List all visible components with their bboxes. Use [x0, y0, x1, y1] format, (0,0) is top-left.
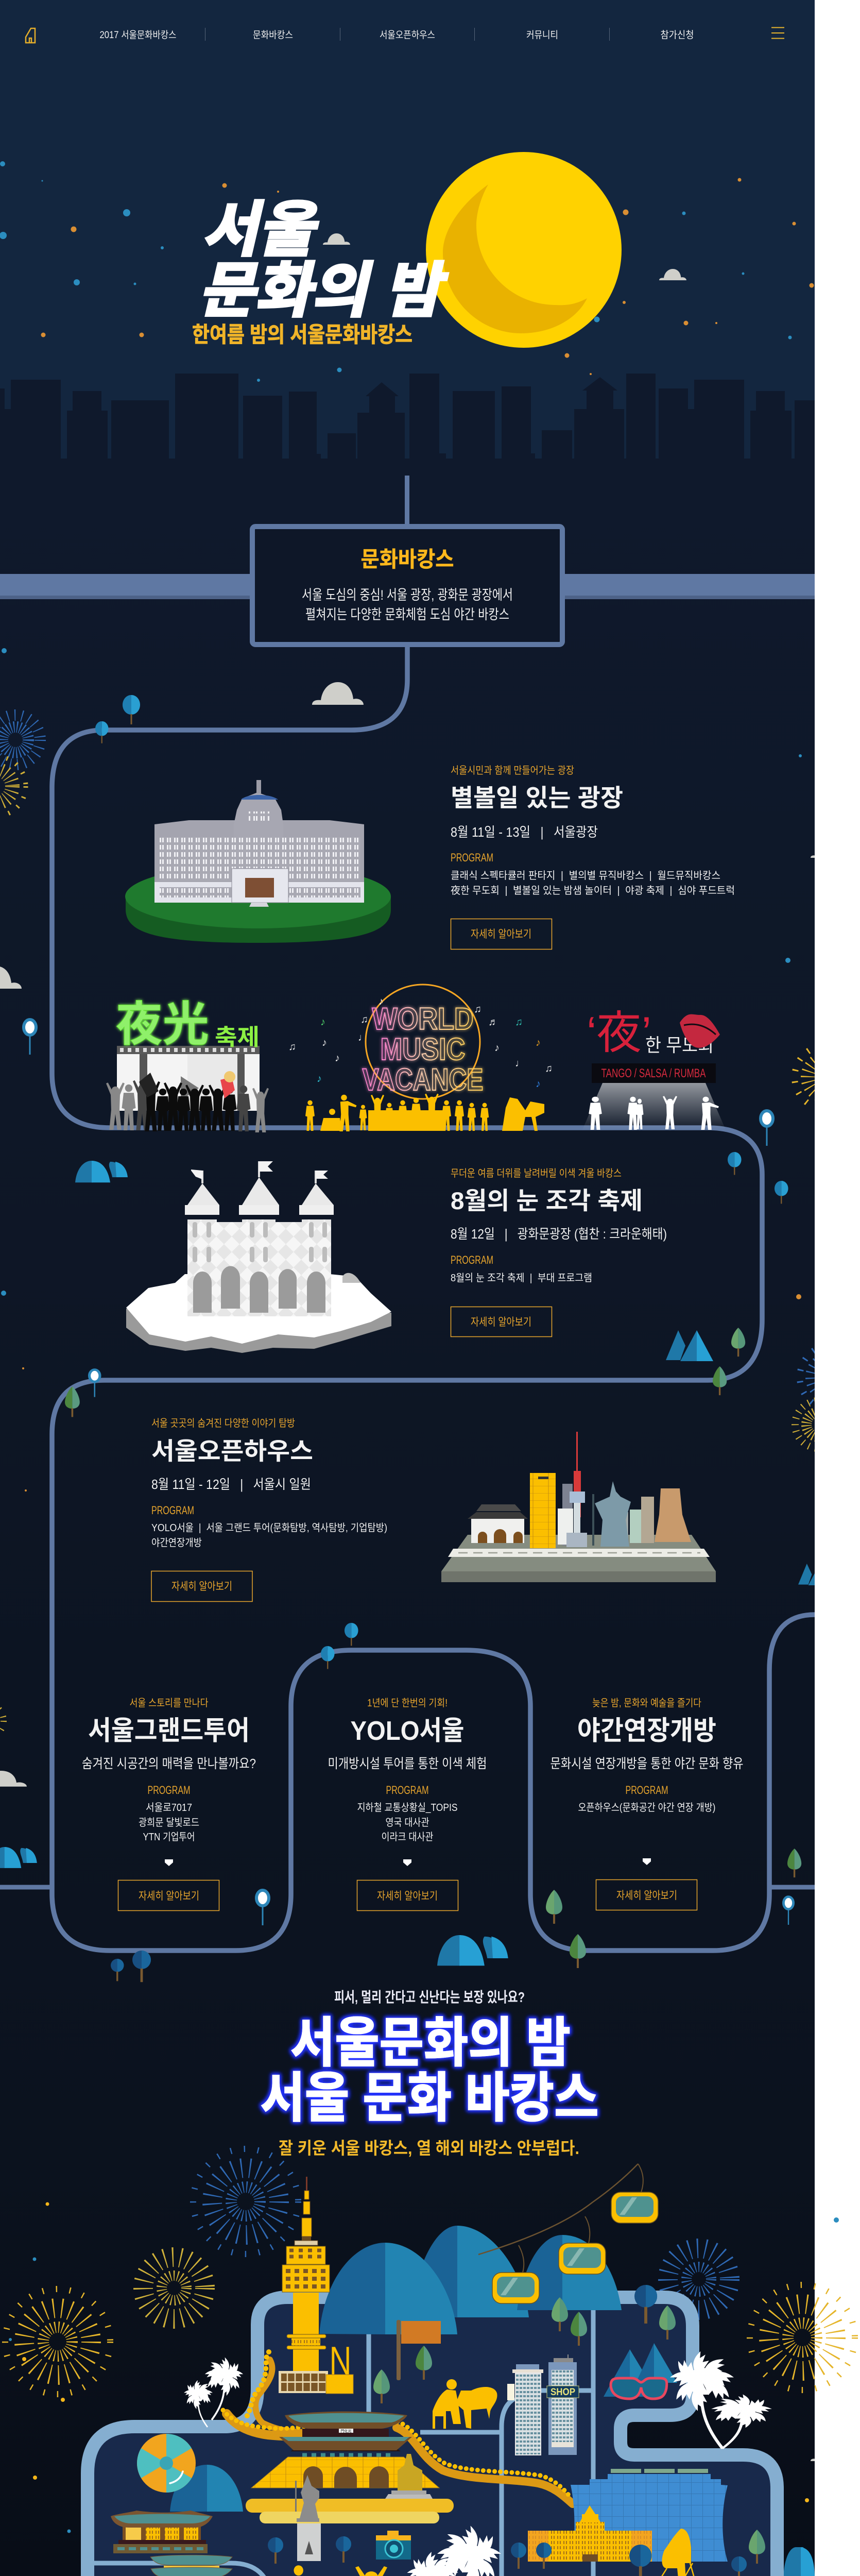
nav items: 서울오픈하우스 — [380, 29, 435, 41]
clouds: hero — [323, 233, 686, 280]
illustration: World Music Vacance: ♪ — [536, 1078, 541, 1090]
nav items: 커뮤니티 — [526, 29, 558, 41]
camera — [376, 2531, 411, 2560]
map illustration — [88, 2164, 786, 2576]
side scenery — [26, 2547, 815, 2576]
illustration: World Music Vacance: VACANCE — [363, 1062, 483, 1097]
button: 자세히 알아보기 — [471, 928, 531, 940]
fireworks — [0, 715, 860, 1737]
text block: 서울 곳곳의 숨겨진 다양한 이야기 탐방 — [151, 1417, 295, 1429]
N Seoul Tower: N — [330, 2338, 351, 2383]
illustration: World Music Vacance: ♫ — [515, 1016, 523, 1028]
towers: SHOP — [551, 2387, 575, 2398]
column: 야간연장개방: PROGRAM — [625, 1784, 668, 1797]
illustration: World Music Vacance: ♪ — [536, 1037, 541, 1048]
illustration: World Music Vacance: ♪ — [320, 1016, 325, 1028]
fireworks around map — [5, 2149, 855, 2394]
column: 서울그랜드투어: 서울 스토리를 만나다 — [130, 1697, 208, 1709]
text block — [151, 1417, 387, 1549]
illustration: 夜한 무도회: ‘夜’ — [587, 1007, 651, 1058]
dots — [1, 648, 802, 1492]
column: 야간연장개방 — [550, 1697, 744, 1910]
column: 야간연장개방: 문화시설 연장개방을 통한 야간 문화 향유 — [550, 1756, 744, 1771]
band and connector road — [0, 476, 815, 599]
icon: menu — [771, 28, 784, 38]
column: 서울그랜드투어 — [82, 1697, 256, 1910]
text block: 8월의 눈 조각 축제 — [451, 1187, 643, 1214]
illustration: snow castle — [126, 1161, 391, 1353]
lead-in: 피서, 멀리 간다고 신난다는 보장 있나요? — [334, 1989, 525, 2005]
column: 서울그랜드투어: 광희문 달빛로드 — [139, 1817, 199, 1828]
column: 야간연장개방: 늦은 밤, 문화와 예술을 즐기다 — [592, 1697, 701, 1709]
text block: 서울오픈하우스 — [151, 1437, 313, 1465]
top navigation — [26, 28, 784, 43]
text block: 8월 11일 - 13일 | 서울광장 — [451, 824, 598, 840]
icon: home — [26, 28, 35, 43]
text block — [451, 1167, 667, 1284]
nav items: 문화바캉스 — [253, 29, 293, 41]
text block: 클래식 스펙타큘러 판타지 | 별의별 뮤직바캉스 | 월드뮤직바캉스 — [451, 870, 720, 882]
hanok gate — [150, 2555, 232, 2576]
great wall right — [397, 2421, 573, 2504]
column: 서울그랜드투어: 서울로7017 — [146, 1802, 192, 1814]
hero title: 문화의 밤 — [196, 257, 453, 324]
illustration: World Music Vacance: ♪ — [317, 1073, 322, 1084]
section 1: square — [125, 765, 735, 949]
map dots — [9, 2202, 839, 2576]
old city hall gold — [528, 2505, 652, 2562]
Gwanghwamun gate: 門化光 — [341, 2429, 351, 2433]
section 2: snow festival — [126, 1161, 667, 1353]
text block: 夜한 무도회 | 별볼일 있는 밤샘 놀이터 | 야광 축제 | 심야 푸드트럭 — [451, 885, 735, 896]
great wall left — [223, 2352, 309, 2436]
hero title — [196, 196, 453, 324]
column: YOLO서울: 자세히 알아보기 — [377, 1890, 438, 1902]
text block: 야간연장개방 — [151, 1537, 202, 1549]
illustration: World Music Vacance: ♩ — [358, 1032, 368, 1043]
text block: PROGRAM — [451, 851, 493, 864]
road stubs — [0, 1887, 815, 2576]
map base — [88, 2297, 786, 2576]
section 4: three columns — [82, 1697, 744, 1910]
N Seoul Tower — [279, 2177, 353, 2394]
illustration: 夜한 무도회: TANGO / SALSA / RUMBA — [601, 1066, 706, 1080]
glow title: 서울 문화 바캉스 — [261, 2069, 598, 2128]
column: 서울그랜드투어: 서울그랜드투어 — [88, 1716, 250, 1746]
glow title — [261, 2013, 598, 2128]
silhouette: palm trees — [184, 2351, 772, 2576]
column: 야간연장개방: 자세히 알아보기 — [616, 1890, 677, 1902]
text block: PROGRAM — [151, 1504, 194, 1517]
column: 야간연장개방: 야간연장개방 — [577, 1716, 716, 1746]
button: 자세히 알아보기 — [171, 1581, 232, 1592]
illustration: World Music Vacance: ♫ — [545, 1063, 553, 1074]
text block: PROGRAM — [451, 1253, 493, 1266]
nav items: 참가신청 — [660, 29, 694, 41]
plaza strips — [246, 2499, 454, 2523]
map flags — [229, 2320, 441, 2576]
glass city hall — [571, 2469, 728, 2562]
column: 서울그랜드투어: YTN 기업투어 — [143, 1831, 195, 1843]
silhouette: pianist — [433, 2379, 497, 2429]
illustration: World Music Vacance: MUSIC — [380, 1032, 466, 1066]
section 5 heading — [261, 1989, 598, 2158]
intro heading: 문화바캉스 — [360, 547, 454, 571]
illustration: World Music Vacance: ♪ — [322, 1037, 327, 1048]
silhouette: dancers — [291, 2565, 387, 2576]
Admiral Yi statue — [295, 2475, 321, 2561]
text block: 8월의 눈 조각 축제 | 부대 프로그램 — [451, 1272, 592, 1284]
sub heading: 잘 키운 서울 바캉스, 열 해외 바캉스 안부럽다. — [279, 2139, 579, 2158]
text block: 8월 12일 | 광화문광장 (협찬 : 크라운해태) — [451, 1226, 667, 1242]
illustration: World Music Vacance: ♬ — [488, 1016, 498, 1028]
column: YOLO서울: 미개방시설 투어를 통한 이색 체험 — [328, 1756, 487, 1771]
illustration: World Music Vacance — [288, 985, 553, 1131]
nav items: 2017 서울문화바캉스 — [100, 29, 176, 41]
button — [451, 919, 552, 949]
Gwanghwamun gate — [251, 2411, 439, 2488]
column: 서울그랜드투어: 숨겨진 시공간의 매력을 만나볼까요? — [82, 1756, 256, 1771]
glasses — [611, 2378, 667, 2399]
text block — [451, 765, 735, 896]
button — [451, 1307, 552, 1336]
trees and pins — [0, 695, 831, 1982]
illustration: Seoul landmarks — [441, 1432, 716, 1582]
illustration: World Music Vacance: ♫ — [360, 1014, 368, 1025]
illustration: 夜한 무도회 — [582, 1007, 726, 1131]
column: YOLO서울: PROGRAM — [386, 1784, 428, 1797]
beach ball — [137, 2434, 196, 2493]
text block: 무더운 여름 더위를 날려버릴 이색 겨울 바캉스 — [451, 1167, 622, 1179]
illustration: 야광 축제 — [106, 998, 269, 1132]
illustration: World Music Vacance: WORLD — [372, 1002, 474, 1036]
towers — [507, 2354, 579, 2455]
panel: intro box — [252, 527, 562, 645]
King Sejong statue — [385, 2454, 433, 2499]
clouds — [312, 682, 364, 705]
hero title: 서울 — [199, 196, 326, 263]
intro text: 펼쳐지는 다양한 문화체험 도심 야간 바캉스 — [305, 607, 509, 622]
illustration: World Music Vacance: ♫ — [288, 1041, 296, 1053]
illustration: Seoul Library on green island — [125, 780, 391, 943]
silhouette: cellist — [658, 2529, 695, 2576]
nav items — [100, 29, 694, 41]
winding road — [52, 647, 815, 1951]
mountains — [170, 2226, 677, 2576]
illustration: 夜한 무도회: 한 무도회 — [645, 1035, 714, 1056]
intro text — [302, 587, 513, 622]
button — [151, 1571, 252, 1601]
hero stars — [0, 161, 814, 382]
button: 자세히 알아보기 — [471, 1316, 531, 1328]
illustration: 야광 축제: 축제 — [215, 1025, 260, 1050]
glow title: 서울문화의 밤 — [290, 2013, 571, 2073]
text block: YOLO서울 | 서울 그랜드 투어(문화탐방, 역사탐방, 기업탐방) — [151, 1522, 387, 1534]
column: YOLO서울: YOLO서울 — [350, 1716, 465, 1746]
column: 서울그랜드투어: PROGRAM — [147, 1784, 191, 1797]
illustration: World Music Vacance: ♪ — [335, 1053, 340, 1064]
column: YOLO서울: 지하철 교통상황실_TOPIS — [357, 1802, 457, 1814]
inner roads — [94, 2310, 770, 2576]
illustration: 야광 축제: 夜光 — [116, 998, 209, 1051]
hanok pavilion — [111, 2511, 213, 2553]
column: YOLO서울: 영국 대사관 — [385, 1817, 429, 1828]
moon — [426, 152, 622, 348]
illustration: World Music Vacance: ♪ — [494, 1042, 500, 1054]
cable car — [478, 2164, 658, 2303]
column: YOLO서울: 1년에 단 한번의 기회! — [367, 1697, 448, 1709]
illustration: World Music Vacance: ♩ — [515, 1058, 525, 1069]
column: 서울그랜드투어: 자세히 알아보기 — [139, 1890, 199, 1902]
illustration: World Music Vacance: ♪ — [379, 996, 384, 1007]
intro text: 서울 도심의 중심! 서울 광장, 광화문 광장에서 — [302, 587, 513, 603]
hero subtitle: 한여름 밤의 서울문화바캉스 — [192, 323, 412, 347]
text block: 서울시민과 함께 만들어가는 광장 — [451, 765, 574, 776]
city skyline — [0, 374, 815, 467]
section 3: open house — [151, 1417, 716, 1601]
illustration: World Music Vacance: ♫ — [474, 1004, 481, 1015]
column: YOLO서울: 이라크 대사관 — [381, 1831, 434, 1843]
text block: 8월 11일 - 12일 | 서울시 일원 — [151, 1477, 311, 1492]
column: YOLO서울 — [328, 1697, 487, 1910]
text block: 별볼일 있는 광장 — [451, 784, 623, 811]
map trees — [108, 2285, 765, 2576]
festival row — [106, 985, 726, 1132]
column: 야간연장개방: 오픈하우스(문화공간 야간 연장 개방) — [578, 1802, 716, 1814]
decorative scenery: upper sections — [0, 648, 860, 2576]
